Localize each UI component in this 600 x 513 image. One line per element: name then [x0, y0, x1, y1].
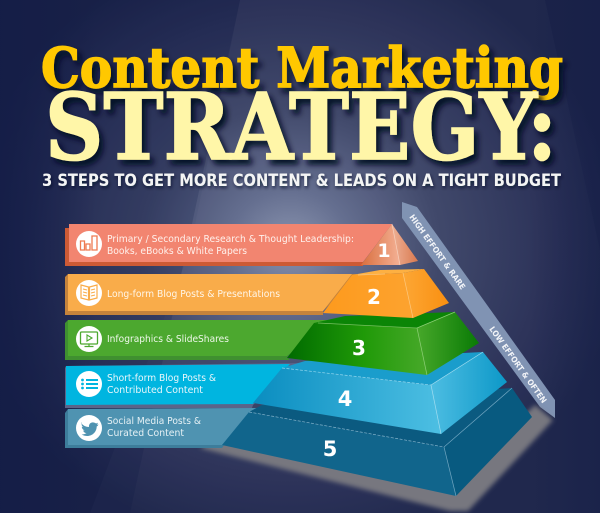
banner 4: short-form — [65, 363, 300, 408]
banner 1: research — [65, 224, 392, 266]
banner 5: social media — [65, 408, 270, 448]
ribbon label: high effort: HIGH EFFORT & RARE — [407, 213, 467, 291]
icon: presentation screen — [76, 326, 102, 352]
banner text: Books, eBooks & White Papers — [107, 246, 247, 257]
pyramid tier 4 — [253, 352, 507, 434]
banner text: Short-form Blog Posts & — [107, 373, 217, 384]
banner 3: infographics — [65, 320, 330, 360]
tier number: 4 — [338, 387, 352, 411]
icon: open book — [76, 280, 102, 306]
icon: bar chart — [76, 231, 102, 257]
pyramid tier 3 — [287, 312, 479, 375]
pyramid tier 2 — [323, 269, 449, 318]
tier number: 2 — [367, 285, 381, 309]
pyramid floor shadow — [200, 405, 553, 511]
banner text: Contributed Content — [107, 385, 203, 396]
tier number: 1 — [377, 240, 391, 262]
ribbon label: low effort: LOW EFFORT & OFTEN — [487, 325, 548, 405]
pyramid tier 1 — [361, 224, 418, 265]
banner text: Curated Content — [107, 428, 184, 439]
tier number: 3 — [352, 336, 366, 360]
side ribbon: effort scale — [402, 202, 555, 418]
banner text: Primary / Secondary Research & Thought Leadership: — [107, 234, 354, 245]
banner text: Long-form Blog Posts & Presentations — [107, 289, 280, 300]
tier number: 5 — [323, 437, 337, 461]
banner text: Social Media Posts & — [107, 416, 202, 427]
pyramid tier 5 — [222, 388, 532, 496]
icon: list — [76, 371, 102, 397]
banner text: Infographics & SlideShares — [107, 334, 229, 345]
banner 2: long-form — [65, 274, 360, 315]
icon: twitter bird — [76, 415, 102, 441]
